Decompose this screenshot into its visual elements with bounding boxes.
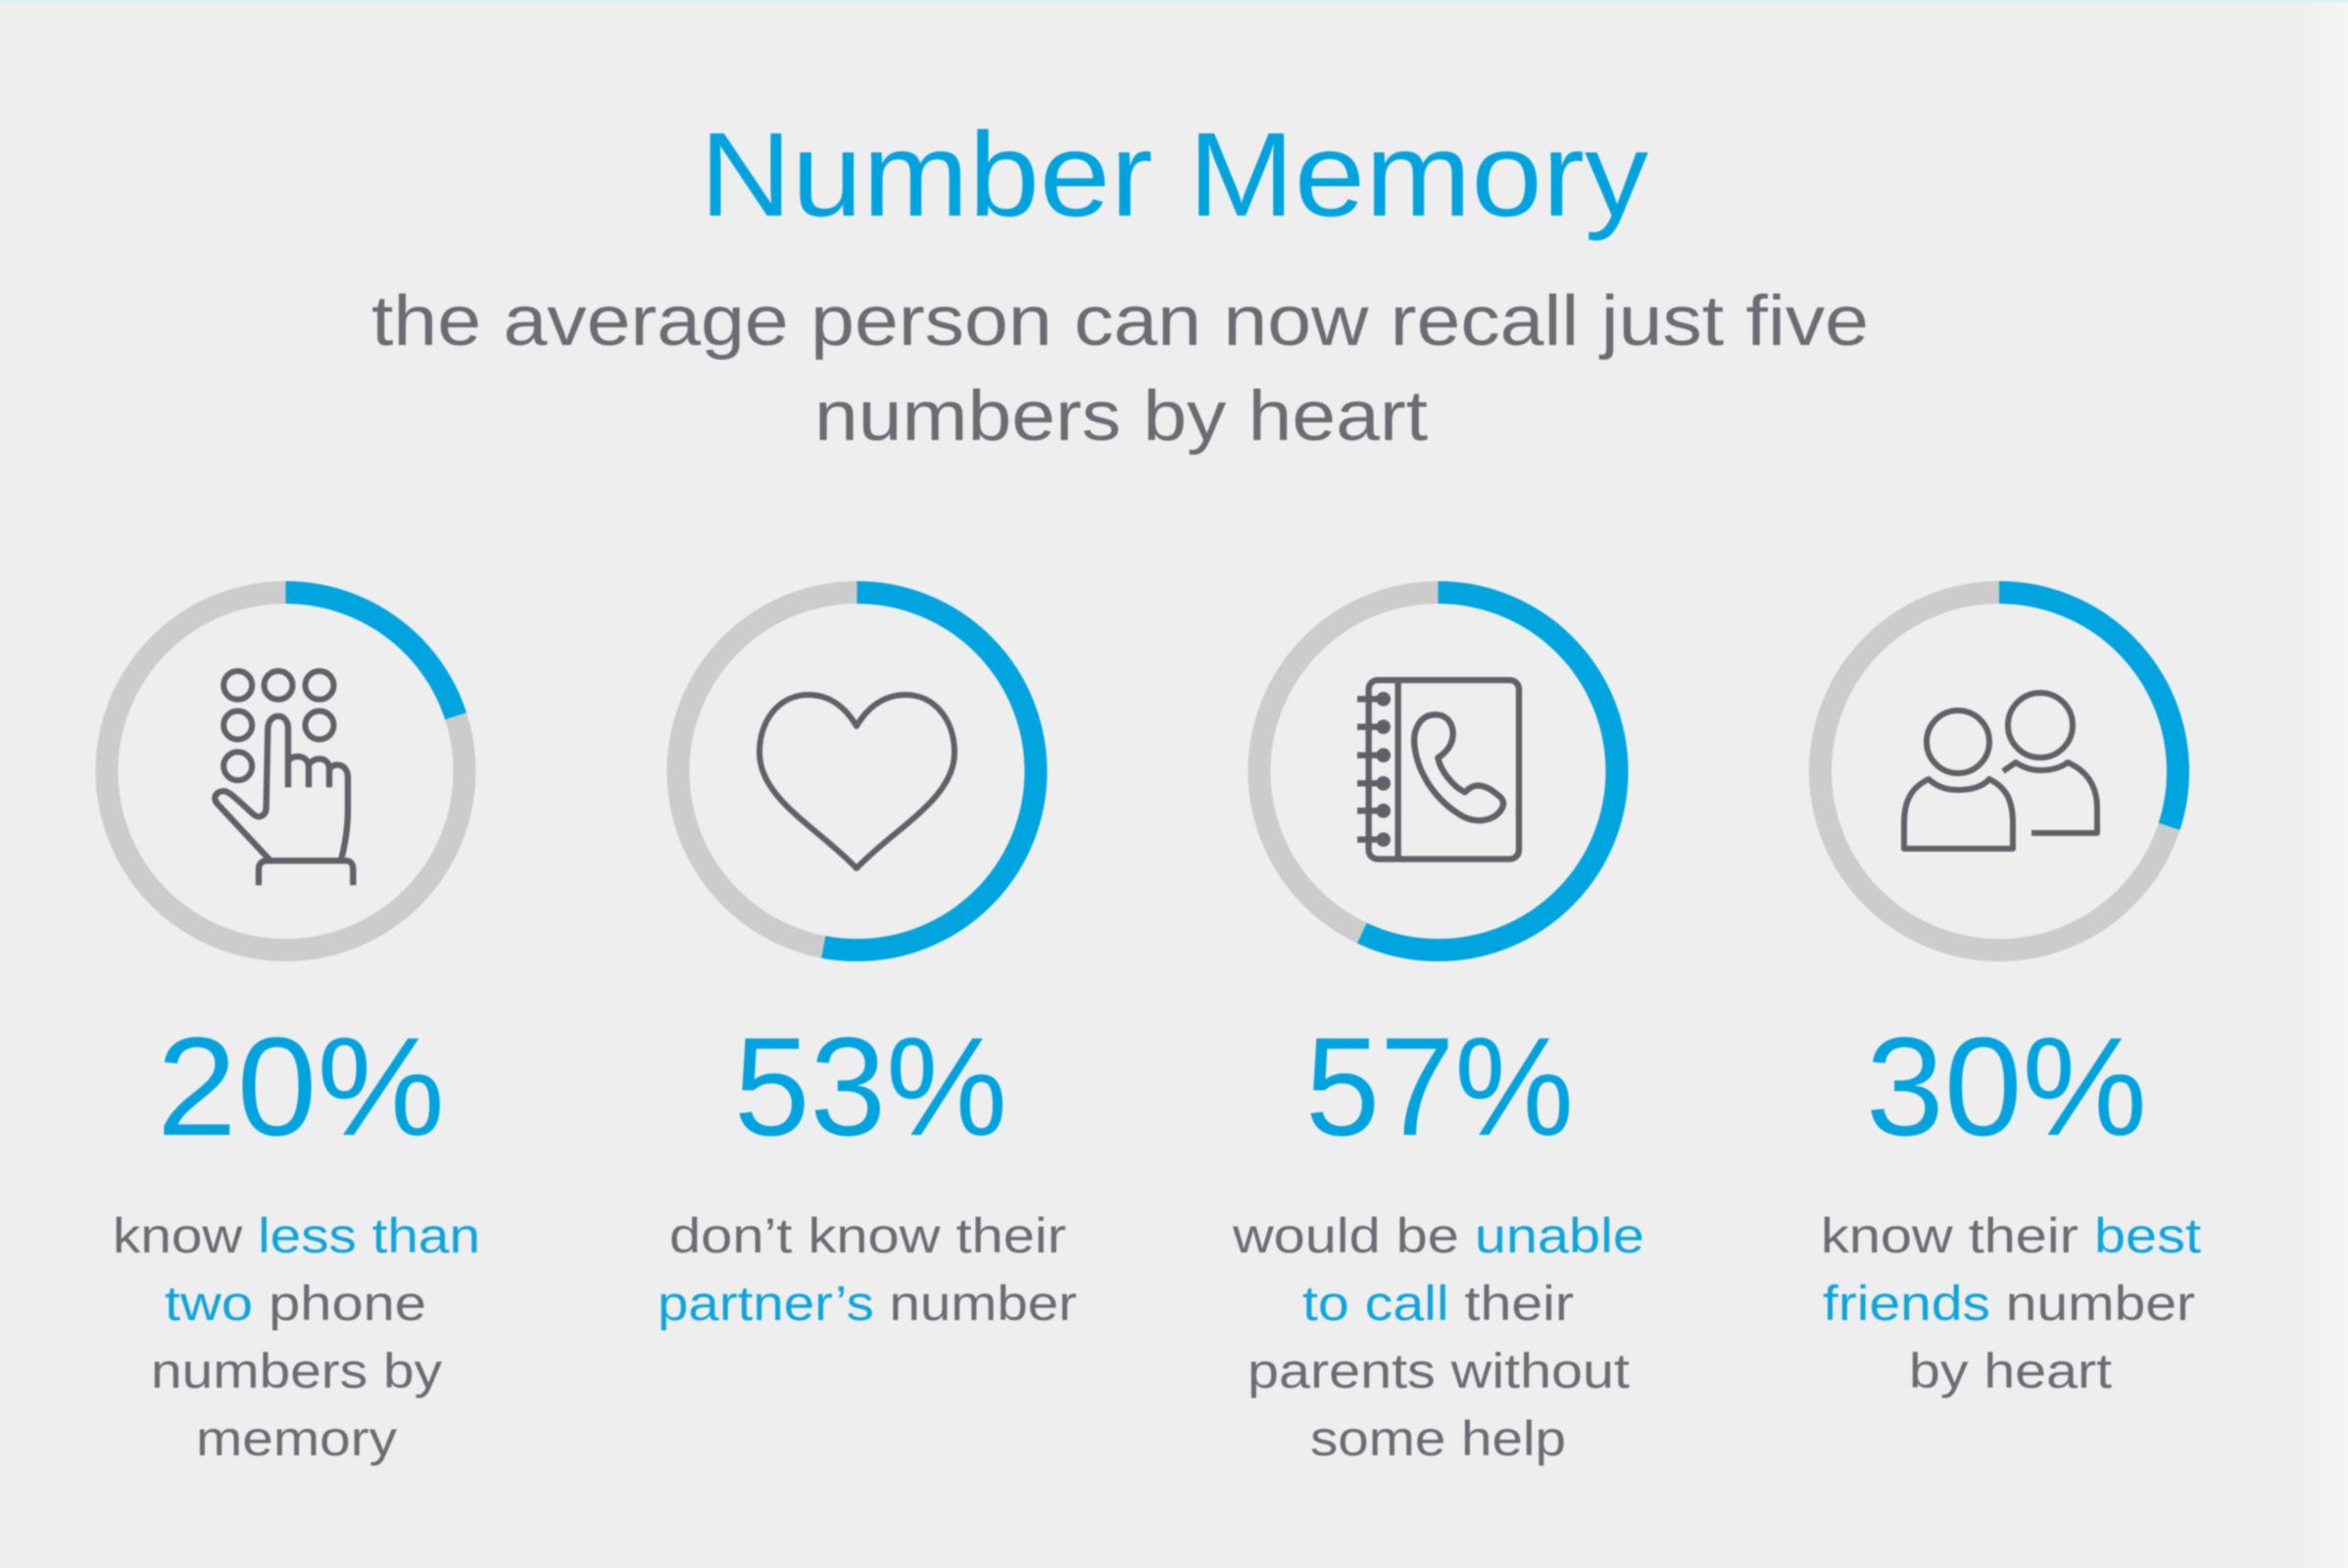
icon: hand on keypad (215, 671, 353, 885)
subtitle (371, 282, 1869, 456)
description: 20%: know less than (113, 1208, 480, 1263)
description: 30%: know their best (1821, 1208, 2201, 1263)
description: 57%: some help (1310, 1411, 1566, 1466)
description: 53% (658, 1208, 1077, 1331)
icon: phone book (1357, 680, 1519, 859)
subtitle: the average person can now recall just five (371, 282, 1869, 361)
donut chart: 30% (1821, 592, 2177, 951)
description: 20%: two phone (165, 1276, 426, 1331)
description: 57%: parents without (1247, 1344, 1630, 1398)
description: 30% (1821, 1208, 2201, 1398)
description: 20%: numbers by (151, 1344, 442, 1398)
description: 53%: partner’s number (658, 1276, 1077, 1331)
panel: 57 percent (1232, 592, 1644, 1466)
description: 57%: to call their (1302, 1276, 1574, 1331)
percentage: 20%: 20% (157, 1009, 445, 1165)
percentage: 57%: 57% (1305, 1009, 1574, 1165)
panel: 20 percent (107, 592, 480, 1466)
subtitle: numbers by heart (814, 377, 1428, 456)
panel: 53 percent (658, 592, 1077, 1331)
title: Number Memory (700, 108, 1648, 241)
icon: two people (1904, 693, 2097, 849)
description: 57%: would be unable (1232, 1208, 1644, 1263)
description: 30%: by heart (1909, 1344, 2112, 1398)
percentage: 53%: 53% (734, 1009, 1007, 1165)
description: 57% (1232, 1208, 1644, 1466)
panel: 30 percent (1821, 592, 2201, 1398)
description: 20%: memory (196, 1411, 397, 1466)
description: 53%: don’t know their (669, 1208, 1066, 1263)
donut chart: 53% (678, 592, 1036, 951)
icon: heart (759, 695, 954, 868)
donut chart: 57% (1259, 592, 1617, 951)
donut chart: 20% (107, 592, 465, 951)
description: 20% (113, 1208, 480, 1466)
percentage: 30%: 30% (1866, 1009, 2147, 1165)
description: 30%: friends number (1823, 1276, 2195, 1331)
